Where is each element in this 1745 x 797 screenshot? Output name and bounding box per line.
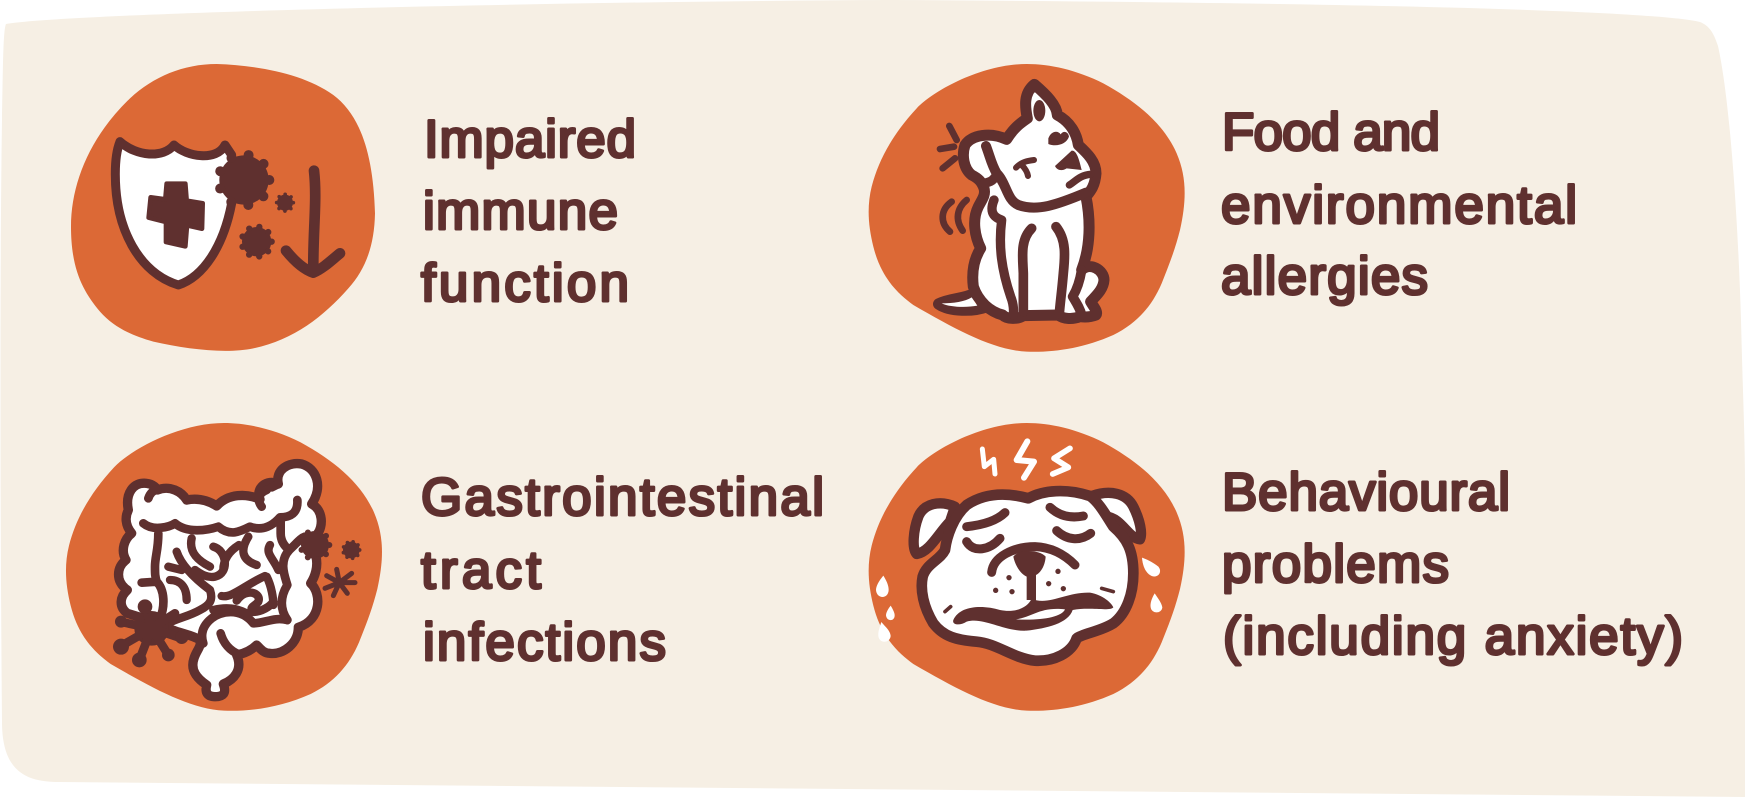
right ear [1092, 493, 1141, 539]
small germ [277, 194, 293, 211]
closed eye [1016, 160, 1034, 176]
tongue [1016, 609, 1065, 620]
icon: shield with germs and down arrow [71, 64, 375, 351]
icon: anxious dog face [869, 423, 1185, 711]
germ: asterisk [325, 569, 355, 596]
orange blob [869, 64, 1185, 352]
label: gastrointestinal tract infections: Gastrointestinal [421, 468, 824, 527]
whisker dots [993, 569, 1066, 594]
label: impaired immune function: Impaired [424, 110, 636, 169]
panel: gastrointestinal tract infections [66, 423, 841, 711]
down arrow [286, 171, 340, 273]
chest leg lines [1023, 227, 1082, 315]
label: impaired immune function: function [421, 254, 629, 313]
ear and cheek lines [986, 146, 1086, 208]
orange blob [66, 423, 382, 711]
head [922, 491, 1133, 661]
label: behavioural problems including anxiety: problems [1222, 535, 1449, 594]
dog body [963, 84, 1104, 318]
mouth ticks [945, 588, 1113, 612]
orange blob [869, 423, 1185, 711]
orange blob [71, 64, 375, 351]
nose [1013, 551, 1046, 600]
icon: intestines with germs [66, 423, 382, 711]
ear inner [1033, 100, 1045, 121]
intestine outline [119, 464, 321, 697]
germ: large [301, 531, 329, 559]
label: behavioural problems including anxiety: Behavioural [1222, 463, 1510, 522]
small intestine coils [168, 537, 278, 623]
cross [149, 184, 203, 246]
label: impaired immune function: immune [423, 182, 618, 241]
lower colon [202, 612, 287, 654]
label: gastrointestinal tract infections: tract [421, 541, 541, 600]
tail [939, 293, 987, 310]
mouth [1069, 174, 1091, 185]
label: food and environmental allergies: allergies [1221, 247, 1428, 306]
eye [1048, 132, 1069, 145]
left ear [914, 503, 955, 554]
scratch motion lines [940, 126, 957, 168]
scratching leg [984, 175, 1014, 315]
nose [1055, 151, 1082, 170]
germ: small [343, 542, 360, 558]
large germ [219, 155, 269, 205]
stress bolts [982, 441, 1070, 478]
shield [115, 142, 240, 285]
colon inner walls [142, 522, 305, 620]
panel: impaired immune function [71, 64, 652, 351]
label: gastrointestinal tract infections: infections [423, 613, 666, 672]
forehead wrinkles [967, 507, 1091, 549]
germ: lower left splat [113, 599, 188, 667]
label: behavioural problems including anxiety: (including anxiety) [1223, 607, 1683, 666]
panel: behavioural problems [869, 423, 1683, 711]
panel: food and environmental allergies [869, 64, 1594, 352]
label: food and environmental allergies: environmental [1221, 176, 1577, 235]
mouth [953, 593, 1113, 631]
muzzle line [992, 547, 1075, 572]
wag motion lines [943, 200, 967, 232]
intestine folds [143, 484, 297, 532]
label: food and environmental allergies: Food and [1222, 103, 1440, 162]
icon: scratching dog [869, 64, 1185, 352]
medium germ [242, 227, 272, 257]
sweat drops [876, 558, 1162, 642]
